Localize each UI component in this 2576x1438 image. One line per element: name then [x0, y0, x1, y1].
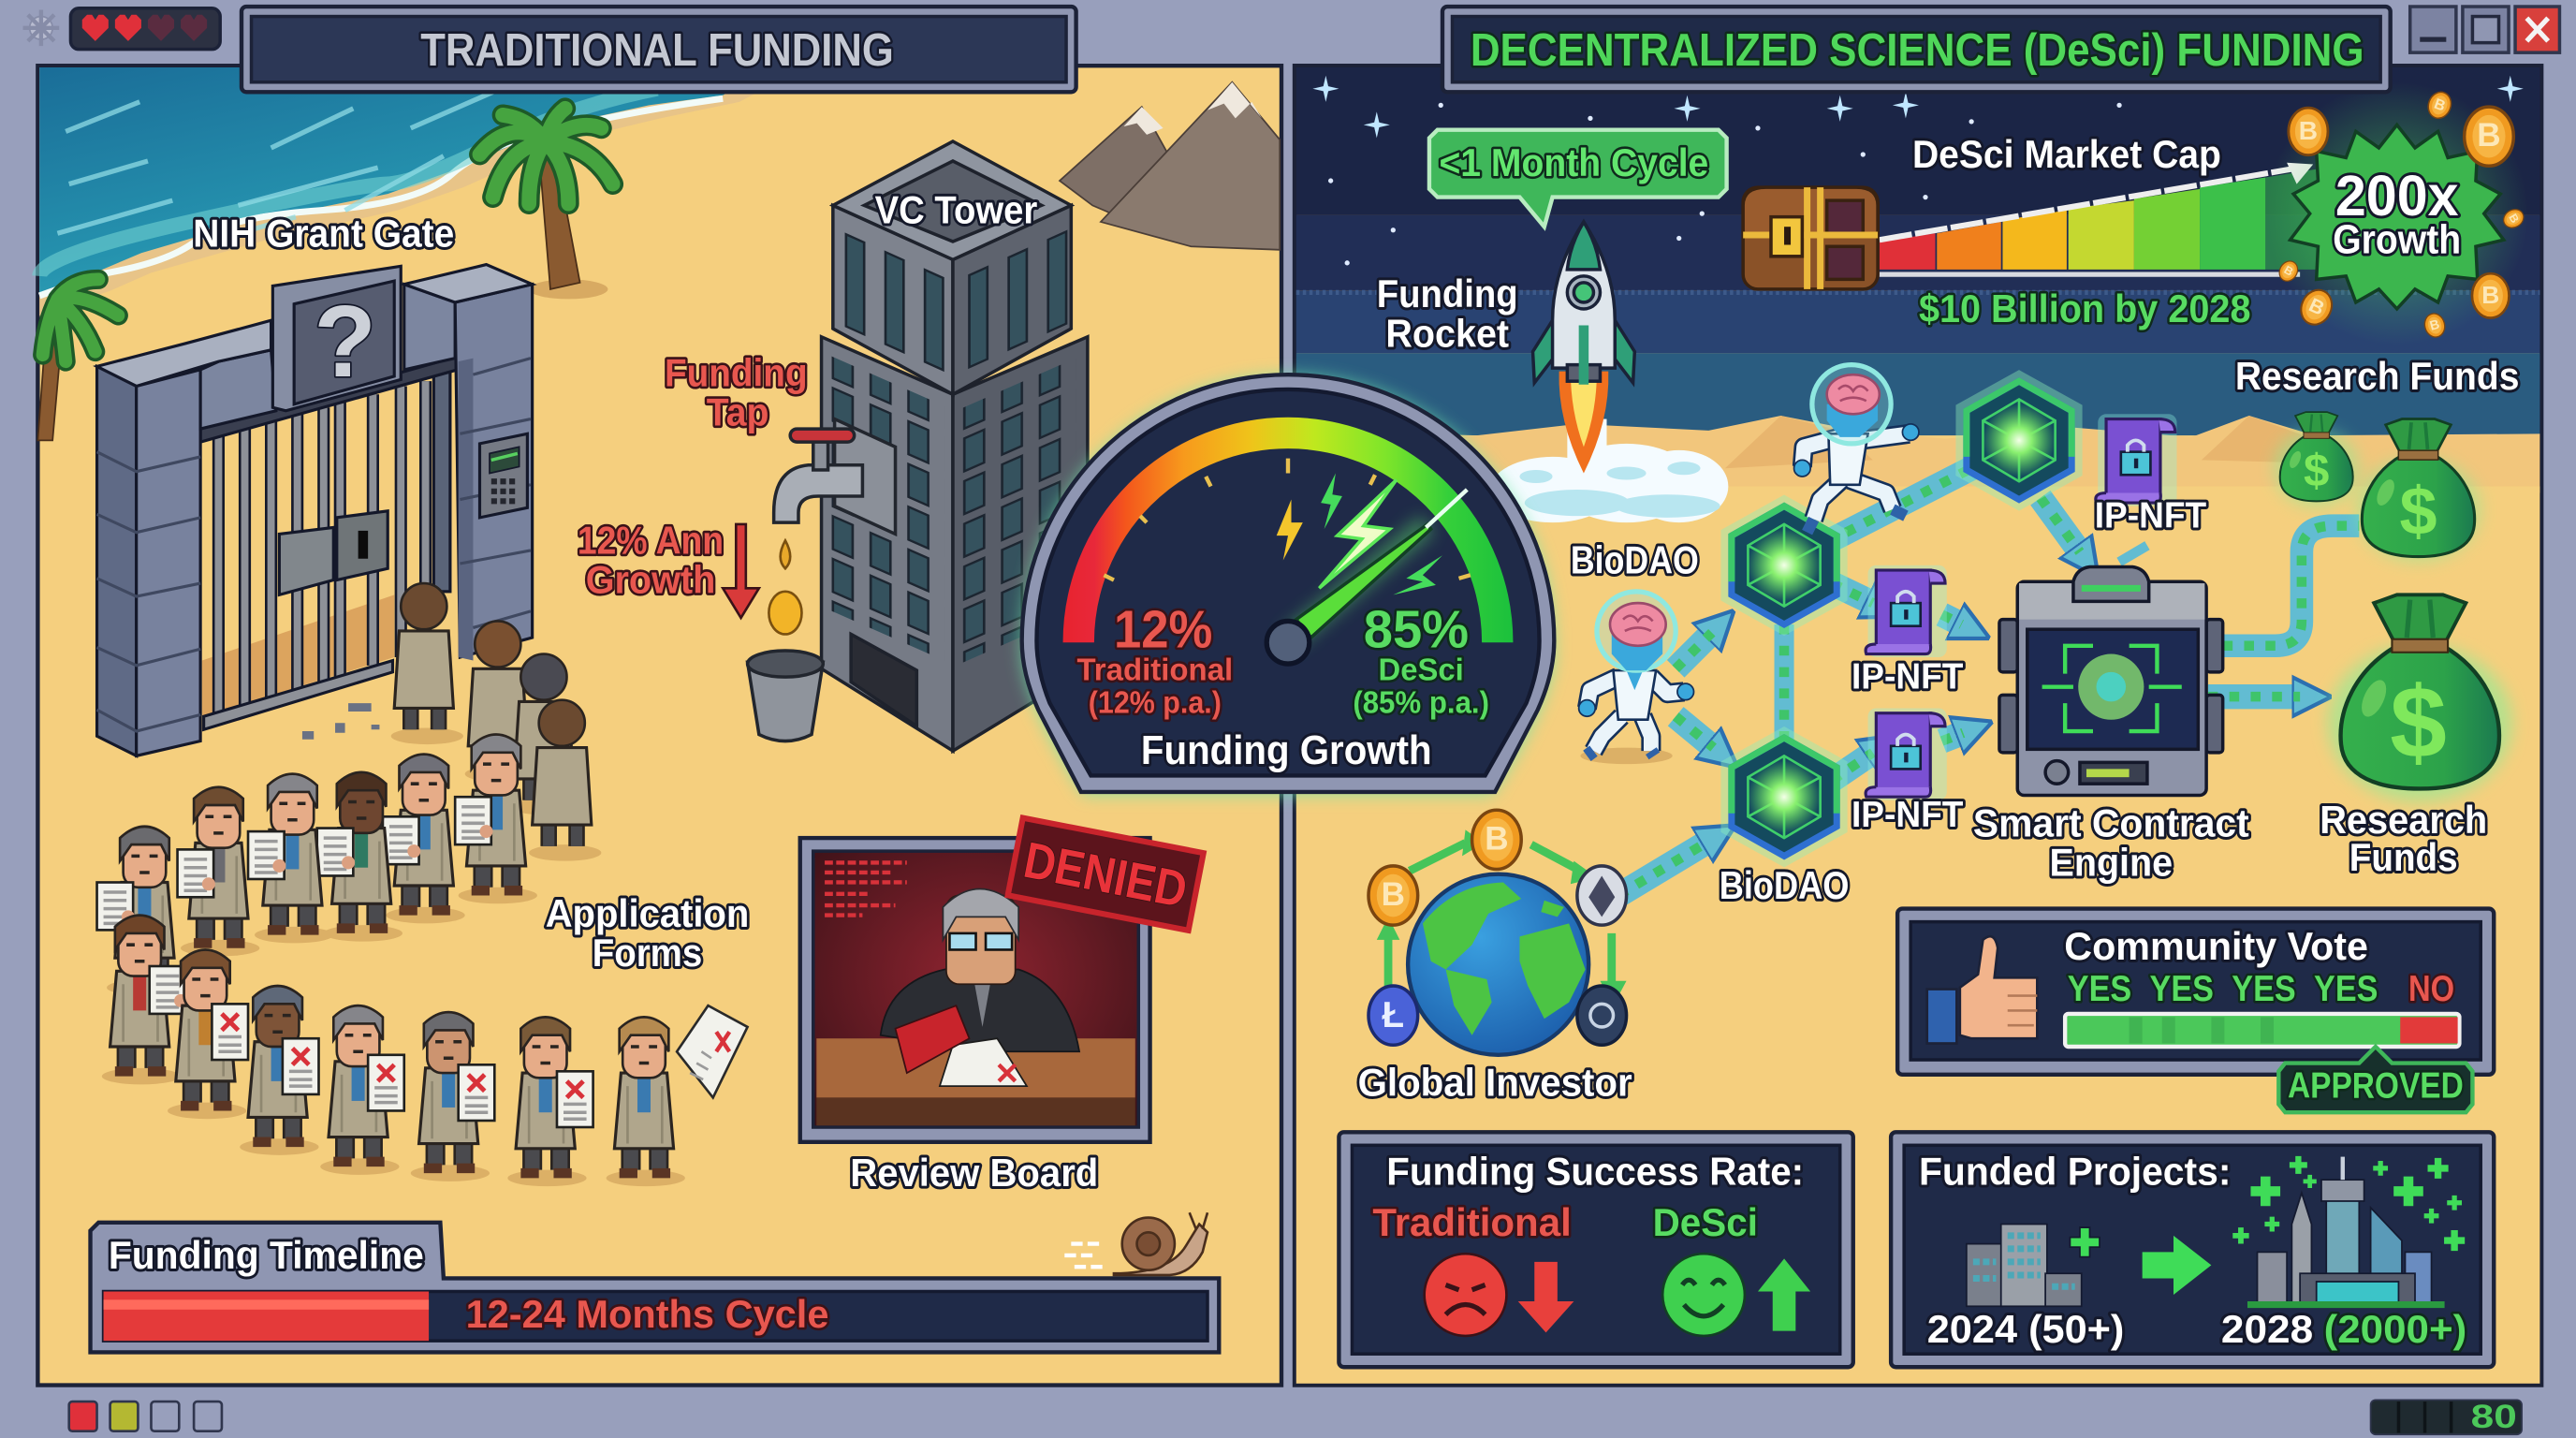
bolt: bright [1319, 479, 1397, 588]
flow arrows: capital flow through network [1618, 468, 2359, 896]
icon: money bag small: $ [2304, 447, 2329, 497]
stamp: DENIED: DENIED [1019, 831, 1192, 918]
bolt: yellow [1277, 500, 1303, 560]
arrow: growth [2143, 1236, 2211, 1295]
label: BioDAO upper: BioDAO [1571, 538, 1699, 582]
label: Funding Rocket: Rocket [1385, 311, 1509, 355]
icon: scientist top [1794, 365, 1919, 533]
label: Smart Contract Engine [1973, 800, 2249, 884]
illustration: review board [800, 838, 1150, 1142]
label: VC Tower: VC Tower [875, 188, 1037, 232]
hud: hearts lives [70, 8, 220, 50]
icon: settings gear [23, 10, 59, 46]
icon: dripping coins [768, 540, 801, 634]
panel: traditional funding beach scene: ? [314, 285, 376, 399]
vote labels: YES [2150, 969, 2214, 1009]
panel: community vote [1897, 909, 2494, 1075]
vote labels: YES [2232, 969, 2296, 1009]
coin: ethereum [1577, 866, 1627, 925]
debris [302, 703, 379, 740]
label: Research Funds bottom: Research [2320, 798, 2487, 842]
network node: bottom hexagon [1725, 731, 1843, 862]
vote labels: YES [2068, 969, 2131, 1009]
label: Smart Contract Engine: Smart Contract [1973, 800, 2249, 844]
label: Application Forms: Forms [593, 931, 702, 975]
network node: top hexagon [1960, 374, 2078, 506]
illustration: VC tower [822, 141, 1088, 751]
illustration: global investor crypto ring [1368, 810, 1627, 1055]
callout: under 1 month cycle [1429, 130, 1727, 227]
badge: APPROVED: APPROVED [2288, 1065, 2464, 1106]
badge: 200x growth: Growth [2333, 216, 2461, 262]
gauge arc [1078, 433, 1498, 642]
gauge values: 85% [1364, 600, 1469, 659]
label: 12% annual growth: 12% Ann [578, 518, 724, 562]
header: traditional funding: TRADITIONAL FUNDING [420, 25, 894, 76]
vote progress bar [2065, 1014, 2459, 1047]
icon: sad face [1425, 1254, 1506, 1336]
gauge values: (85% p.a.) [1353, 686, 1489, 721]
gauge values [1076, 600, 1489, 721]
panel: funding timeline [91, 1223, 1219, 1352]
label: BioDAO lower: BioDAO [1720, 863, 1849, 907]
icon: IP-NFT scroll top [2096, 414, 2177, 506]
panel: funded projects: 2028 [2221, 1307, 2313, 1351]
label: Funding Tap [665, 350, 808, 434]
gate keypad [479, 433, 527, 518]
label: 12% annual growth: Growth [586, 558, 715, 602]
label: Funding Rocket [1377, 271, 1518, 355]
flows base [1618, 498, 2300, 896]
vote labels [2068, 969, 2454, 1009]
panel: funding success rate [1339, 1132, 1853, 1367]
label: Global Investor: Global Investor [1358, 1061, 1632, 1105]
icon: palm tree left [37, 279, 118, 440]
panel: funding timeline: 12-24 Months Cycle [466, 1292, 828, 1336]
label: Research Funds bottom: Funds [2349, 835, 2458, 879]
panel: funding timeline: Funding Timeline [109, 1233, 424, 1277]
vote labels: NO [2408, 969, 2454, 1009]
icon: bucket [748, 651, 823, 741]
gate lock [279, 511, 388, 594]
label: NIH Grant Gate: NIH Grant Gate [193, 211, 454, 255]
panel: community vote: Community Vote [2064, 924, 2368, 968]
stars [1312, 76, 2524, 265]
coin: network token [1577, 986, 1627, 1045]
icon: money bag small [2274, 412, 2359, 507]
icons: gold coins [2276, 89, 2526, 339]
label: 12% annual growth [578, 518, 724, 602]
label: Research Funds top: Research Funds [2235, 354, 2519, 398]
gauge title: Funding Growth [1141, 727, 1432, 773]
arrow: down [1518, 1262, 1573, 1332]
panel: traditional funding beach scene [37, 66, 1281, 1386]
needle [1266, 490, 1467, 664]
panel: funded projects [1891, 1132, 2494, 1367]
label: IP-NFT lower: IP-NFT [1852, 795, 1964, 835]
label: Smart Contract Engine: Engine [2049, 840, 2173, 884]
label: Funding Tap: Tap [707, 390, 768, 434]
header: traditional funding [242, 7, 1076, 92]
panel: funded projects: Funded Projects: [1919, 1149, 2231, 1193]
gauge values: (12% p.a.) [1089, 686, 1222, 721]
status bar left lights [69, 1401, 222, 1431]
icon: applicant queue [97, 583, 748, 1186]
badge: 200x growth: 200x [2335, 164, 2459, 228]
label: Funding Rocket: Funding [1377, 271, 1518, 315]
icon: small buildings 2024 [1967, 1225, 2100, 1306]
label: Funding Tap: Funding [665, 350, 808, 394]
icons: green plus signs [2232, 1156, 2465, 1251]
status bar counter [2371, 1399, 2522, 1435]
icon: thumbs up [1927, 936, 2037, 1043]
bolt: green [1321, 473, 1342, 529]
arrow: up [1758, 1258, 1810, 1331]
mountains [1060, 82, 1280, 250]
panel: funding success rate: DeSci [1653, 1200, 1758, 1244]
label: IP-NFT middle: IP-NFT [1852, 656, 1964, 697]
icon: IP-NFT scroll lower [1866, 708, 1947, 800]
sea and shoreline [39, 67, 805, 315]
chart: DeSci market cap growth [1880, 163, 2326, 274]
left pillar [97, 320, 276, 756]
label: Application Forms [546, 891, 749, 975]
network node: left hexagon [1725, 500, 1843, 631]
panel: funded projects: (2000+) [2324, 1307, 2466, 1351]
vote labels: YES [2314, 969, 2378, 1009]
globe [1408, 874, 1588, 1055]
gate question sign [272, 266, 401, 411]
status bar counter: 80 [2471, 1399, 2517, 1435]
icon: treasure chest [1743, 187, 1878, 289]
label: DeSci Market Cap: DeSci Market Cap [1912, 132, 2221, 176]
icon: money bag medium [2356, 419, 2481, 562]
badge: APPROVED [2278, 1047, 2472, 1112]
arrow: down red [723, 524, 759, 618]
icon: happy face [1662, 1254, 1745, 1336]
icon: funding rocket [1486, 222, 1728, 522]
callout: under 1 month cycle: <1 Month Cycle [1439, 140, 1708, 184]
icon: city 2028 [2247, 1157, 2445, 1306]
icon: money bag medium: $ [2400, 474, 2437, 549]
label: IP-NFT top: IP-NFT [2095, 495, 2206, 536]
badge: 200x growth [2265, 82, 2528, 345]
panel: funded projects: 2024 (50+) [1927, 1307, 2124, 1351]
window controls [2410, 7, 2559, 52]
icon: IP-NFT scroll middle [1866, 565, 1947, 657]
icon: money bag large [2328, 594, 2512, 801]
icon: money bag large: $ [2390, 666, 2447, 780]
gauge tick marks [1104, 459, 1471, 580]
illustration: NIH grant gate [97, 265, 533, 756]
header: DeSci funding [1442, 7, 2391, 92]
label: Research Funds bottom [2320, 798, 2487, 879]
gauge values: 12% [1114, 600, 1212, 659]
icon: snail [1064, 1212, 1208, 1275]
gauge: funding growth [1021, 374, 1555, 795]
bolt: small green [1393, 555, 1442, 594]
coin: litecoin: Ł [1383, 995, 1404, 1035]
gauge values: Traditional [1076, 653, 1233, 688]
panel: funding success rate: Funding Success Rate: [1386, 1149, 1804, 1193]
coin: litecoin [1368, 986, 1418, 1045]
gate bars [218, 370, 450, 714]
icon: funding tap [774, 419, 896, 534]
panel: DeSci funding scene [1295, 66, 2541, 1386]
illustration: smart contract engine [1999, 567, 2223, 795]
gauge values: DeSci [1379, 653, 1464, 688]
right block [404, 265, 533, 661]
panel: funding success rate: Traditional [1372, 1200, 1572, 1244]
label: Review Board: Review Board [850, 1151, 1098, 1195]
night sky and horizon [1296, 67, 2539, 1384]
icon: scientist lower [1579, 592, 1694, 764]
header: DeSci funding: DECENTRALIZED SCIENCE (DeSci) FUNDING [1471, 25, 2364, 76]
label: Application Forms: Application [546, 891, 749, 935]
label: ten billion by 2028: $10 Billion by 2028 [1919, 286, 2250, 330]
icon: palm tree right [479, 109, 613, 299]
